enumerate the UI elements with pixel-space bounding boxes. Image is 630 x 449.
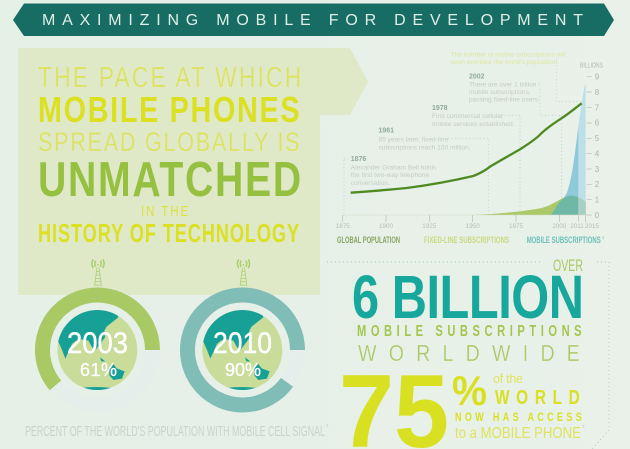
stat: 6 billion (352, 256, 584, 366)
caption: cell signal (25, 423, 329, 440)
annotation: 2002 (469, 74, 540, 104)
annotation: 1876 (351, 156, 437, 187)
ring chart: 2010 90%: 2010 (213, 327, 272, 360)
ring chart: 2010 90% (187, 295, 298, 405)
headline text: IN THE (141, 203, 188, 219)
title banner (13, 4, 614, 36)
y axis labels (595, 72, 600, 220)
x axis labels: 1975 (509, 223, 523, 230)
headline text: THE PACE AT WHICH (38, 63, 301, 94)
y axis labels: 6 (595, 119, 600, 128)
y axis labels: 7 (595, 103, 600, 112)
stat: 75 percent: to a MOBILE PHONE (455, 425, 581, 442)
legend: GLOBAL POPULATION (337, 235, 400, 245)
ring chart: 2003 61%: 2003 (67, 327, 128, 360)
annotation: 1961: subscriptions reach 100 million. (378, 144, 471, 152)
annotation: 2002: mobile subscriptions, (469, 89, 531, 96)
stat: 6 billion: MOBILE SUBSCRIPTIONS (357, 322, 582, 339)
ring chart: 2003 61% (42, 295, 152, 405)
chart: subscriptions timeline: BILLIONS (580, 60, 603, 70)
caption: cell signal: PERCENT OF THE WORLD'S POPULATION WITH MOBILE CELL SIGNAL (25, 423, 325, 440)
stat: 6 billion: OVER (553, 256, 583, 275)
legend: FIXED-LINE SUBSCRIPTIONS (424, 235, 509, 245)
stat: 75 percent: WORLD (495, 386, 580, 409)
x axis labels: 1875 (336, 223, 350, 230)
stat: 75 percent: % (452, 367, 487, 414)
ring chart: 2010 90%: 90% (225, 360, 261, 380)
stat: 6 billion: 6 BILLION (352, 263, 584, 331)
chart: subscriptions timeline (336, 52, 605, 245)
title banner: MAXIMIZING MOBILE FOR DEVELOPMENT (42, 12, 583, 29)
annotation: 1876: conversation. (351, 180, 390, 187)
y axis labels: 5 (595, 134, 600, 143)
x axis labels: 1900 (379, 223, 393, 230)
headline text: UNMATCHED (38, 153, 301, 207)
x axis labels: 2011 (570, 223, 584, 230)
headline text: MOBILE PHONES (38, 89, 300, 130)
x axis labels: 2000 (552, 223, 567, 230)
y axis labels: 2 (595, 180, 600, 189)
x axis labels: 2015 (585, 223, 599, 230)
y axis labels: 1 (595, 196, 600, 204)
annotation: 1961: 1961 (378, 128, 394, 134)
annotation: 1978: 1978 (432, 105, 448, 112)
annotation: 1978 (432, 105, 515, 128)
x axis labels: 1950 (466, 223, 480, 230)
ring chart: 2003 61%: 61% (80, 360, 117, 380)
annotation: 1961: 85 years later, fixed-line (378, 136, 448, 144)
stat: 6 billion: WORLDWIDE (358, 341, 580, 366)
y axis labels: 9 (595, 72, 600, 82)
stat: 75 percent (339, 354, 585, 449)
legend: 1 (602, 235, 605, 240)
stat: 75 percent: NOW HAS ACCESS (455, 411, 582, 424)
stat: 75 percent: 3 (582, 424, 585, 429)
headline text (38, 63, 301, 248)
y axis labels: 3 (595, 165, 600, 174)
stat: 75 percent: of the (493, 372, 523, 386)
panel: headline arrow (18, 48, 368, 295)
annotation: overtake: soon overtake the world's population (450, 59, 558, 66)
headline text: HISTORY OF TECHNOLOGY (38, 219, 299, 248)
annotation: 2002: There are over 1 billion (469, 82, 537, 88)
annotation: 1876: Alexander Graham Bell holds (351, 164, 437, 172)
legend (337, 235, 605, 245)
annotation: 1876: 1876 (351, 156, 366, 163)
icon: signal tower 2010 (237, 259, 250, 286)
callout border (327, 262, 609, 449)
y axis labels: 4 (595, 150, 600, 158)
annotation: 2002: passing fixed-line users. (469, 96, 540, 104)
annotation: overtake (450, 52, 566, 66)
x axis labels (336, 223, 599, 230)
annotation: 2002: 2002 (469, 74, 485, 80)
caption: cell signal: 2 (326, 423, 329, 428)
annotation: 1978: First commercial cellular (432, 113, 504, 120)
annotation: 1876: the first two-way telephone (351, 172, 429, 179)
y axis labels: 8 (595, 88, 600, 97)
y axis labels: 0 (595, 211, 600, 220)
annotation: 1961 (378, 128, 471, 152)
x axis labels: 1925 (422, 223, 437, 230)
annotation: 1978: mobile services established. (432, 121, 515, 128)
headline text: SPREAD GLOBALLY IS (38, 128, 300, 158)
icon: signal tower 2003 (92, 259, 104, 286)
annotation: overtake: The number of mobile subscriptions will (450, 52, 566, 58)
